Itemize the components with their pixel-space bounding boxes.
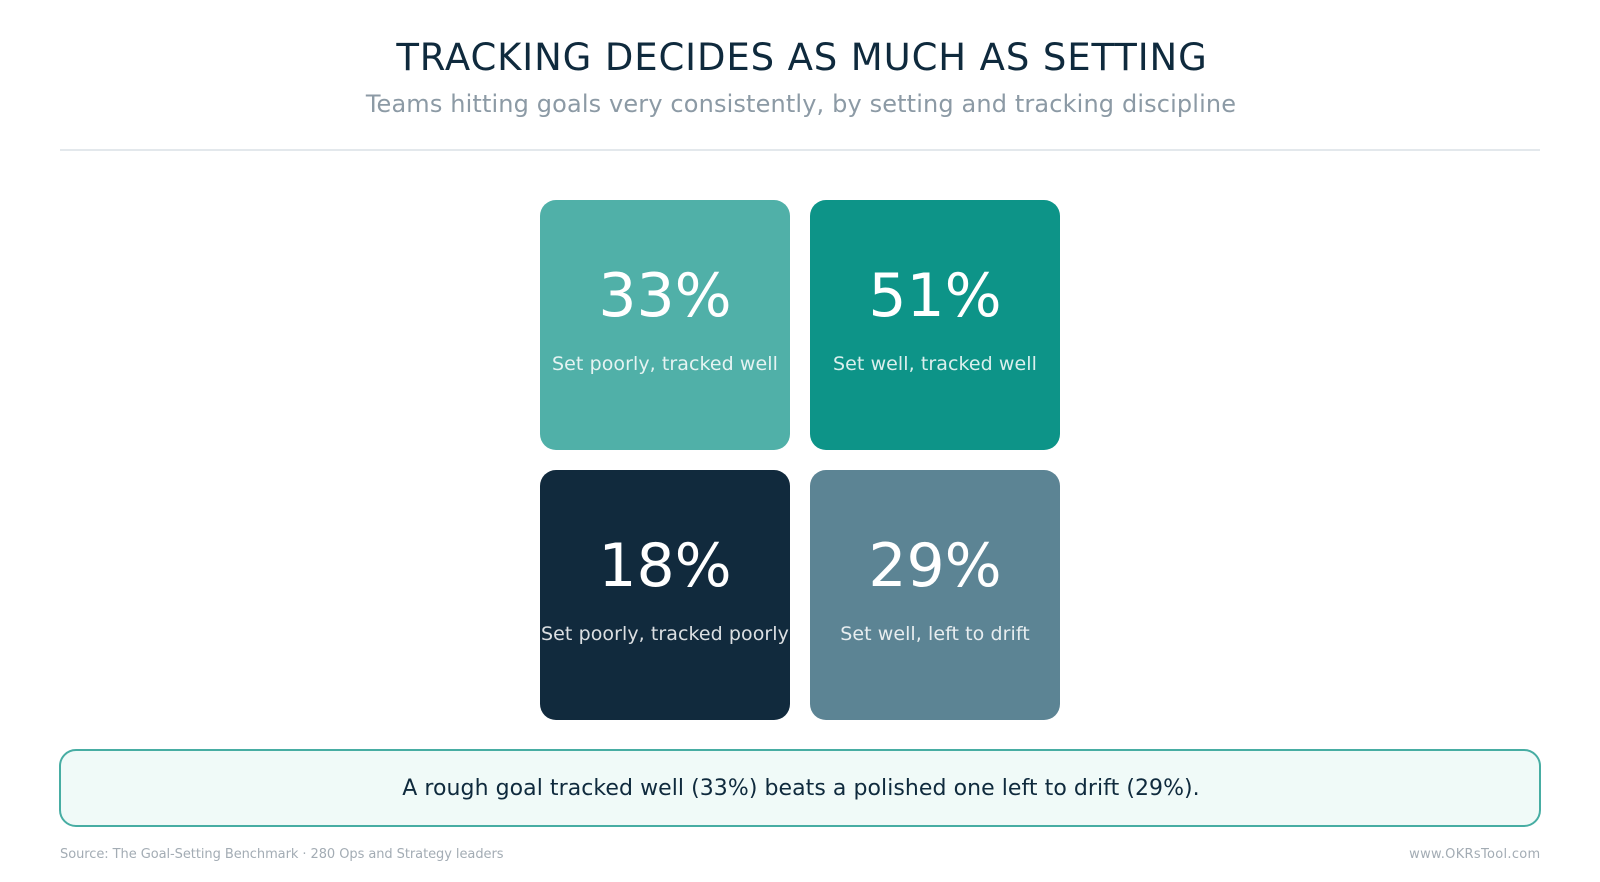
value: 29%: 29%: [868, 531, 1002, 601]
title: TRACKING DECIDES AS MUCH AS SETTING: [396, 36, 1208, 79]
label: set poorly, tracked poorly: Set poorly, tracked poorly: [541, 623, 789, 645]
value: 33%: 33%: [598, 261, 732, 331]
card: set poorly, tracked well: [540, 200, 790, 450]
value: 18%: 18%: [598, 531, 732, 601]
card: set well, tracked well: [810, 200, 1060, 450]
subtitle: Teams hitting goals very consistently, by setting and tracking discipline: [366, 90, 1236, 118]
label: set well, left to drift: Set well, left to drift: [840, 623, 1030, 645]
website: www.OKRsTool.com: [1409, 847, 1540, 862]
source note: Source: The Goal-Setting Benchmark · 280 Ops and Strategy leaders: [60, 847, 503, 862]
card: set well, left to drift: [810, 470, 1060, 720]
card: set poorly, tracked poorly: [540, 470, 790, 720]
label: set poorly, tracked well: Set poorly, tracked well: [552, 353, 778, 375]
callout: [59, 749, 1541, 827]
callout text: A rough goal tracked well (33%) beats a polished one left to drift (29%).: [402, 776, 1200, 801]
panel: quadrant grid: [540, 200, 1060, 720]
value: 51%: 51%: [868, 261, 1002, 331]
label: set well, tracked well: Set well, tracked well: [833, 353, 1037, 375]
